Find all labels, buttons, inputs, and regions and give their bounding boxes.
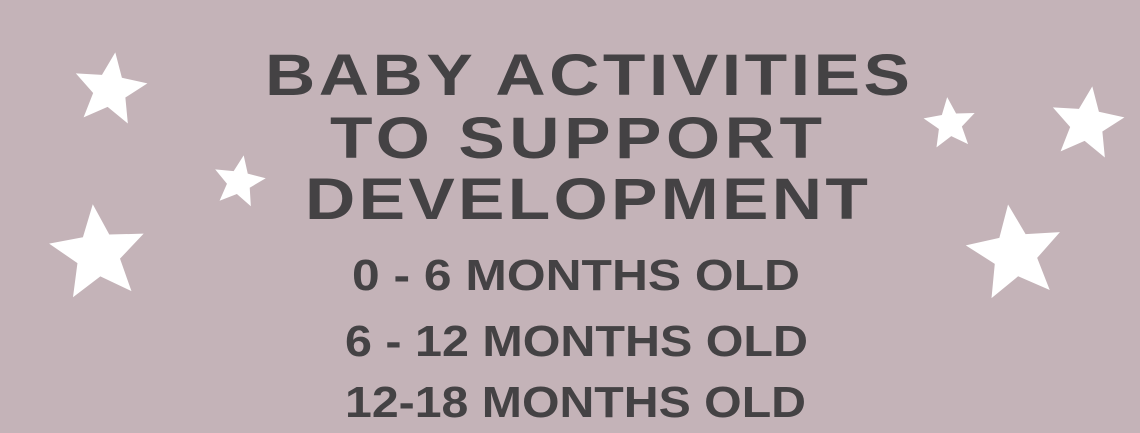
title: DEVELOPMENT	[305, 166, 868, 232]
star: small right	[922, 94, 978, 148]
age ranges: 6 - 12 MONTHS OLD	[345, 317, 808, 366]
star: small left	[210, 151, 269, 208]
title: TO SUPPORT	[330, 105, 822, 171]
star: top right	[1047, 81, 1128, 159]
title: BABY ACTIVITIES	[265, 42, 910, 108]
age ranges: 12-18 MONTHS OLD	[345, 378, 806, 427]
star: bottom left	[45, 199, 150, 299]
star: top left	[70, 47, 151, 125]
title	[265, 42, 910, 232]
age ranges: 0 - 6 MONTHS OLD	[352, 251, 800, 300]
age ranges	[345, 251, 808, 427]
star: bottom right	[961, 198, 1068, 301]
